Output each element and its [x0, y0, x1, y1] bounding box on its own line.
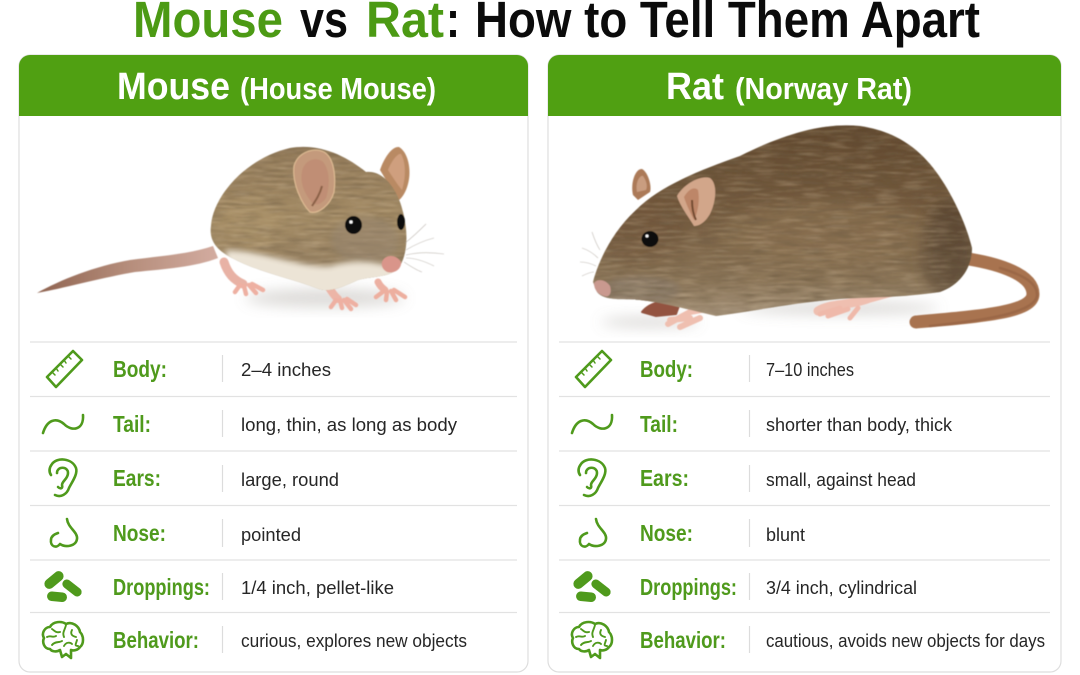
- title: [133, 0, 980, 48]
- row: nose: [580, 519, 805, 547]
- row: body: 2–4 inches: [241, 359, 331, 380]
- row: body: [47, 351, 331, 387]
- row: nose: Nose:: [640, 520, 693, 546]
- row: ears: small, against head: [766, 469, 916, 490]
- row: behavior: Behavior:: [640, 627, 726, 653]
- icon: ear: [50, 459, 76, 496]
- row: tail: [43, 411, 458, 437]
- row: tail: long, thin, as long as body: [241, 414, 458, 435]
- icon: ruler: [576, 351, 611, 387]
- row: droppings: [571, 569, 917, 602]
- spec table: mouse: [30, 342, 517, 658]
- panel: rat: [548, 55, 1061, 672]
- row: droppings: Droppings:: [640, 574, 737, 600]
- panel header: rat: (Norway Rat): [735, 71, 912, 106]
- row: body: Body:: [640, 356, 693, 382]
- row: behavior: Behavior:: [113, 627, 199, 653]
- row: droppings: 1/4 inch, pellet-like: [241, 577, 394, 598]
- row: nose: Nose:: [113, 520, 166, 546]
- panel header: rat: [548, 55, 1061, 116]
- row: body: Body:: [113, 356, 167, 382]
- row: nose: [51, 519, 301, 547]
- row: tail: shorter than body, thick: [766, 414, 953, 435]
- row: tail: Tail:: [113, 411, 151, 437]
- row: ears: Ears:: [113, 465, 161, 491]
- illustration: norway rat: [580, 120, 1037, 327]
- icon: nose: [580, 519, 606, 547]
- row: tail: Tail:: [640, 411, 678, 437]
- panel background: mouse: [19, 55, 528, 672]
- icon: brain: [572, 622, 612, 658]
- panel header: mouse: (House Mouse): [240, 71, 436, 106]
- icon: droppings: [42, 569, 83, 602]
- row: behavior: [43, 622, 467, 658]
- icon: tail: [572, 415, 612, 433]
- panel header: mouse: [19, 55, 528, 116]
- icon: tail: [43, 415, 83, 433]
- icon: ear: [579, 459, 605, 496]
- row: behavior: curious, explores new objects: [241, 630, 467, 651]
- row: ears: [579, 459, 916, 496]
- row: body: 7–10 inches: [766, 359, 854, 380]
- row: nose: blunt: [766, 524, 805, 545]
- row: behavior: [572, 622, 1045, 658]
- row: droppings: [42, 569, 394, 602]
- panel background: rat: [548, 55, 1061, 672]
- row: ears: large, round: [241, 469, 339, 490]
- row: nose: pointed: [241, 524, 301, 545]
- panel header: rat: Rat: [666, 66, 724, 108]
- icon: droppings: [571, 569, 612, 602]
- icon: ruler: [47, 351, 82, 387]
- panel: mouse: [19, 55, 528, 672]
- row: tail: [572, 411, 953, 437]
- row: ears: [50, 459, 339, 496]
- illustration: house mouse: [37, 140, 444, 309]
- row: droppings: 3/4 inch, cylindrical: [766, 577, 917, 598]
- icon: nose: [51, 519, 77, 547]
- icon: brain: [43, 622, 83, 658]
- row: body: [576, 351, 854, 387]
- row: behavior: cautious, avoids new objects for days: [766, 630, 1045, 651]
- spec table: rat: [559, 342, 1050, 658]
- row: ears: Ears:: [640, 465, 689, 491]
- panel header: mouse: Mouse: [117, 66, 230, 108]
- row: droppings: Droppings:: [113, 574, 210, 600]
